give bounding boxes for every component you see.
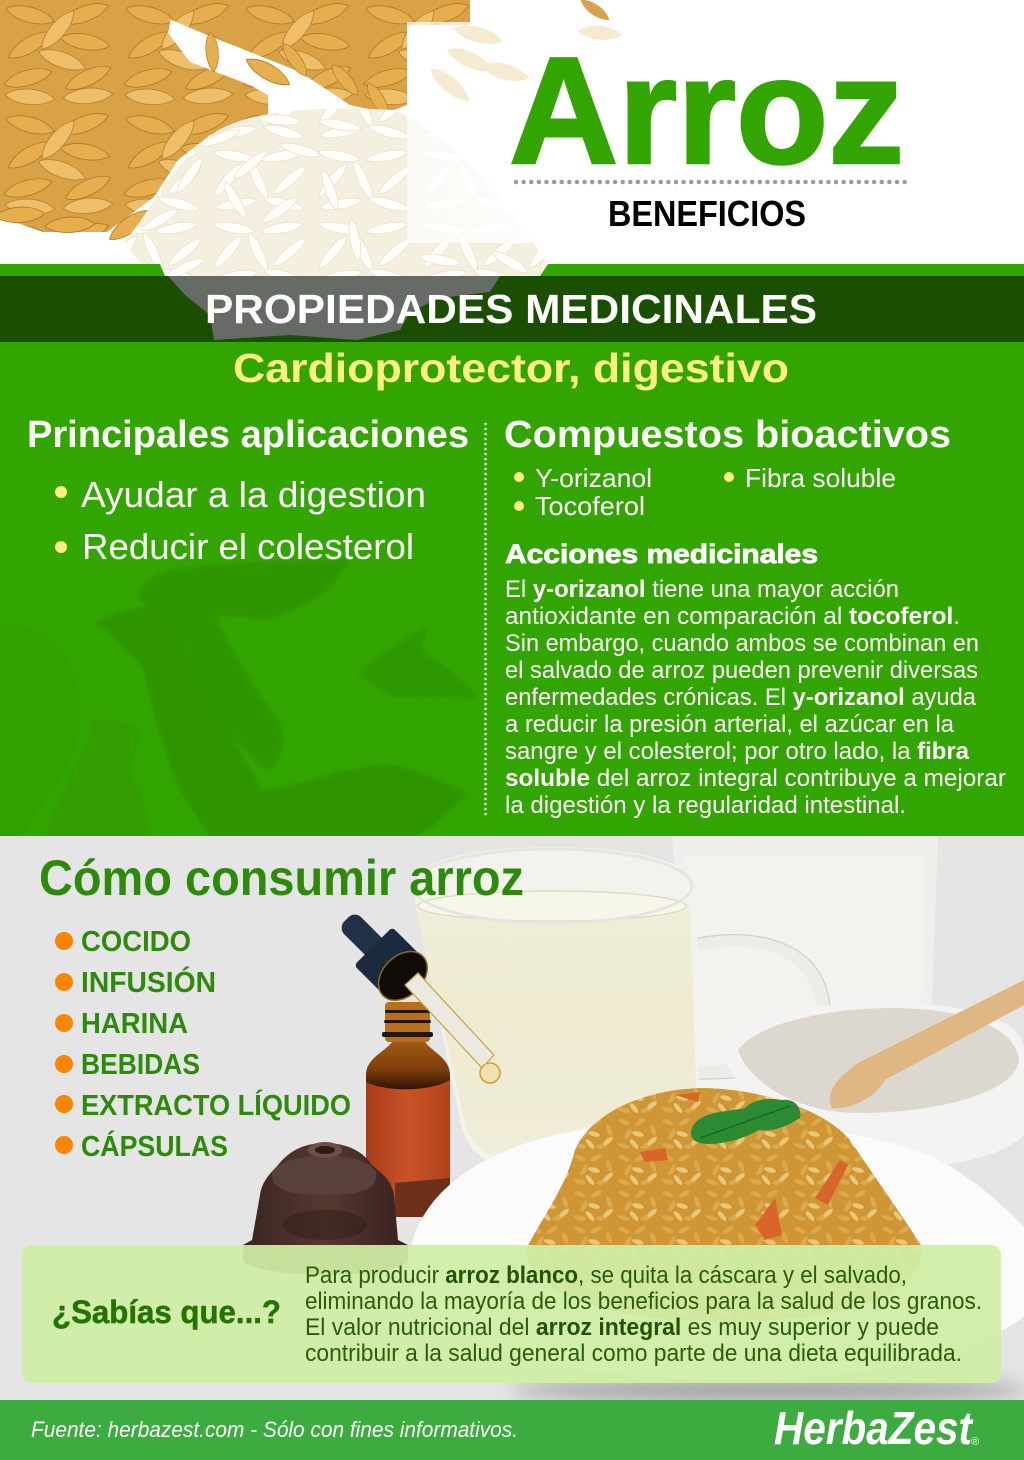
logo: HerbaZest: HerbaZest	[774, 1402, 973, 1454]
heading: medicinal properties: PROPIEDADES MEDICINALES	[205, 286, 817, 332]
heading: main applications: Principales aplicaciones	[27, 414, 469, 456]
panel: medicinal properties green	[0, 264, 1024, 836]
callout: did you know	[22, 1245, 1001, 1383]
photo: plate	[408, 1121, 1024, 1402]
callout text	[305, 1262, 982, 1367]
text block: medicinal actions: antioxidante en comparación al tocoferol.	[505, 603, 960, 630]
list: consumption forms: COCIDO	[81, 926, 191, 958]
heading: medicinal actions: Acciones medicinales	[505, 539, 818, 569]
photo: glass of milk	[672, 836, 938, 1110]
bullet list: compounds: Y-orizanol	[535, 463, 652, 493]
list: consumption forms: HARINA	[81, 1008, 188, 1040]
text block: medicinal actions: enfermedades crónicas. El y-orizanol ayuda	[505, 684, 976, 711]
list: consumption forms: EXTRACTO LÍQUIDO	[81, 1088, 351, 1122]
bullet list: applications: Ayudar a la digestion	[81, 474, 426, 515]
divider: dotted line under title	[516, 180, 912, 184]
subtitle: beneficios: BENEFICIOS	[608, 193, 806, 234]
callout heading: ¿Sabías que...?	[52, 1294, 281, 1330]
text block: medicinal actions: el salvado de arroz pueden prevenir diversas	[505, 657, 978, 684]
text block: medicinal actions: Sin embargo, cuando ambos se combinan en	[505, 630, 979, 657]
text block: medicinal actions: la digestión y la regularidad intestinal.	[505, 792, 906, 819]
photo: mug of infusion	[412, 847, 830, 1172]
bullet list: applications: Reducir el colesterol	[82, 526, 414, 567]
heading: how to consume: Cómo consumir arroz	[39, 850, 524, 906]
source note: Fuente: herbazest.com - Sólo con fines informativos.	[31, 1417, 518, 1442]
photo: dropper bottle	[327, 900, 500, 1217]
text block: medicinal actions: El y-orizanol tiene una mayor acción	[505, 576, 899, 603]
callout text: eliminando la mayoría de los beneficios para la salud de los granos.	[305, 1288, 982, 1315]
list: consumption forms: INFUSIÓN	[81, 965, 216, 999]
panel: main applications	[27, 414, 469, 567]
text block: medicinal actions: a reducir la presión arterial, el azúcar en la	[505, 711, 954, 738]
divider: vertical dotted line	[484, 424, 487, 815]
text block: medicinal actions	[505, 576, 1006, 819]
photo: capsule	[243, 1142, 408, 1275]
logo registered mark: ®	[971, 1436, 979, 1448]
panel: how to consume background	[0, 836, 1024, 1400]
bullet list: compounds: Fibra soluble	[745, 463, 896, 493]
panel: bioactive compounds	[504, 414, 1006, 819]
bullet list: compounds	[514, 463, 896, 521]
list: consumption forms: CÁPSULAS	[81, 1129, 228, 1163]
text block: medicinal actions: soluble del arroz integral contribuye a mejorar	[505, 765, 1006, 792]
callout text: El valor nutricional del arroz integral es muy superior y puede	[305, 1314, 939, 1341]
footer	[0, 1400, 1024, 1460]
list: consumption forms: BEBIDAS	[81, 1049, 200, 1081]
subheading: cardioprotector: Cardioprotector, digestivo	[233, 345, 789, 391]
photo: paddy rice and white rice	[0, 0, 623, 281]
text block: medicinal actions: sangre y el colesterol; por otro lado, la fibra	[505, 738, 969, 765]
bullet list: compounds: Tocoferol	[535, 491, 645, 521]
bullet list: applications	[55, 474, 426, 567]
callout text: contribuir a la salud general como parte de una dieta equilibrada.	[305, 1340, 962, 1367]
dark title band with rice shadow	[0, 276, 1024, 342]
list: consumption forms	[55, 926, 351, 1163]
photo: rice mound with leaf	[526, 1088, 921, 1322]
callout text: Para producir arroz blanco, se quita la cáscara y el salvado,	[305, 1262, 907, 1289]
heading: bioactive compounds: Compuestos bioactivos	[504, 414, 951, 456]
title: Arroz: Arroz	[509, 26, 904, 196]
image: arms over abdomen in green tint	[0, 560, 480, 836]
photo: bowl of rice flour with spoon	[716, 980, 1024, 1169]
faint stalk grains behind title	[426, 21, 623, 107]
